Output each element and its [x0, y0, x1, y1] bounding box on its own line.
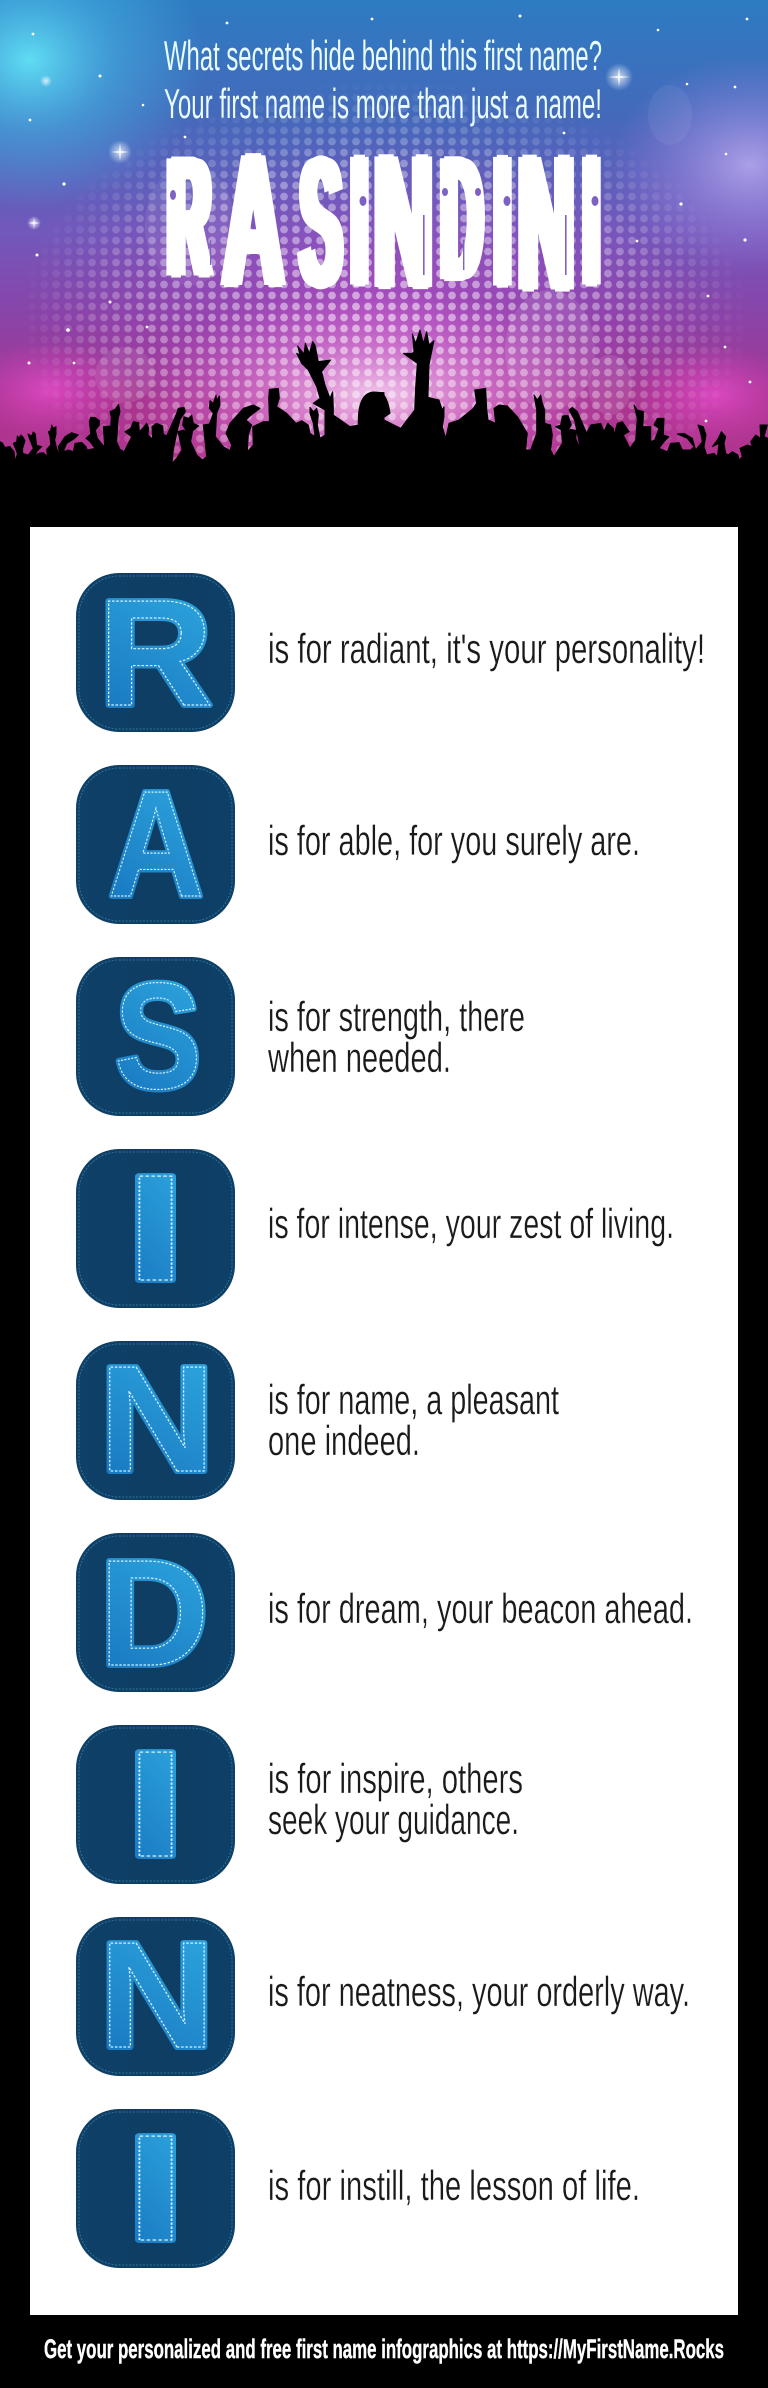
name title: D — [441, 120, 482, 317]
text: I lines: is for inspire, others — [268, 1755, 523, 1802]
row: N — [76, 1334, 559, 1503]
name title: R — [168, 121, 210, 312]
white content panel — [30, 527, 738, 2315]
icon: letter N: N — [99, 1334, 215, 1503]
text: N lines — [268, 1376, 559, 1464]
icon: letter I: I — [124, 1143, 186, 1312]
icon: letter I: I — [124, 1719, 186, 1888]
row: A — [76, 759, 640, 928]
icon: letter N: N — [99, 1910, 215, 2079]
text: S lines: is for strength, there — [268, 993, 525, 1040]
row: I — [76, 2103, 640, 2272]
name title: A — [223, 115, 283, 325]
icon: letter A: A — [108, 759, 204, 928]
text: I lines — [268, 1755, 523, 1843]
name title: S — [300, 119, 341, 324]
icon: letter I: I — [124, 2103, 186, 2272]
icon: letter I — [76, 1143, 235, 1312]
name title: I — [493, 116, 512, 325]
icon: letter N — [76, 1334, 235, 1503]
icon: letter R: R — [98, 568, 213, 737]
icon: letter D: D — [99, 1528, 209, 1697]
row: R — [76, 568, 705, 737]
name title: I — [350, 116, 369, 324]
text: N lines: one indeed. — [268, 1417, 420, 1464]
hero background — [0, 0, 768, 462]
title distress marks — [170, 188, 598, 275]
row: N — [76, 1910, 690, 2079]
icon: letter D: D — [99, 1528, 209, 1697]
icon: letter I: I — [124, 1719, 186, 1888]
crowd silhouette — [0, 330, 768, 528]
icon: letter S — [76, 951, 235, 1120]
row: D — [76, 1528, 693, 1697]
text: N lines: is for name, a pleasant — [268, 1376, 559, 1423]
row: I — [76, 1719, 523, 1888]
icon: letter N — [76, 1910, 235, 2079]
icon: letter R — [76, 568, 235, 737]
icon: letter I — [76, 2103, 235, 2272]
text: I lines: seek your guidance. — [268, 1796, 519, 1843]
name title: N — [374, 115, 433, 328]
stars — [27, 14, 751, 422]
text: S lines: when needed. — [267, 1034, 451, 1081]
name title: I — [582, 116, 601, 324]
icon: letter N: N — [99, 1910, 215, 2079]
row: I — [76, 1143, 674, 1312]
icon: letter I: I — [124, 1143, 186, 1312]
name title: N — [518, 115, 574, 330]
row: S — [76, 951, 525, 1120]
icon: letter N: N — [99, 1334, 215, 1503]
icon: letter A — [76, 759, 235, 928]
name title — [166, 115, 601, 330]
hero banner — [0, 0, 768, 462]
icon: letter S: S — [114, 951, 202, 1120]
icon: letter S: S — [114, 951, 202, 1120]
icon: letter I — [76, 1719, 235, 1888]
icon: letter A: A — [108, 759, 204, 928]
subtitle lines — [164, 32, 602, 127]
icon: letter I: I — [124, 2103, 186, 2272]
icon: letter D — [76, 1528, 235, 1697]
icon: letter R: R — [98, 568, 213, 737]
text: S lines — [267, 993, 525, 1081]
